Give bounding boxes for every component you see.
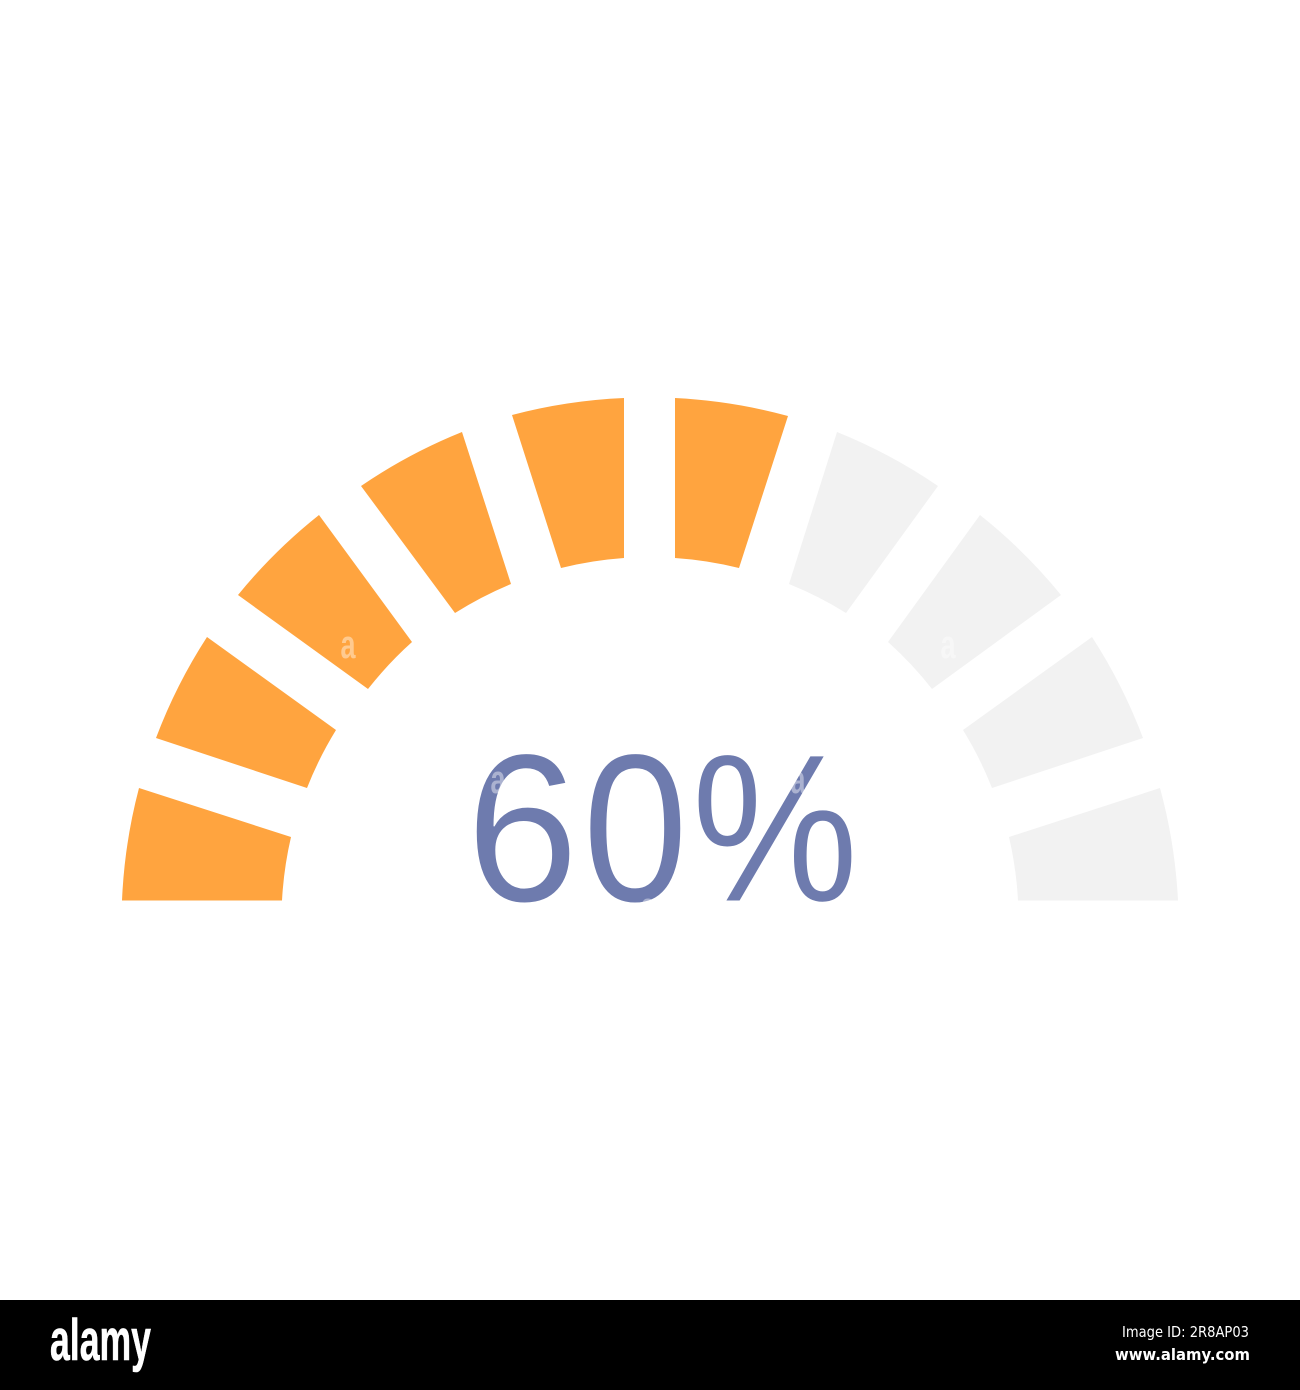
percentage value: 0 — [582, 710, 688, 946]
percentage value: % — [692, 711, 858, 946]
watermark letters: a — [790, 758, 806, 802]
percentage value: 6 — [466, 710, 579, 946]
remaining segments: light grey — [789, 432, 1178, 900]
footer logo: alamy — [50, 1308, 151, 1373]
watermark letters — [340, 623, 956, 929]
footer bar — [0, 1300, 1300, 1390]
percentage value — [466, 710, 858, 946]
watermark letters: a — [340, 623, 356, 667]
filled segments: orange — [122, 398, 788, 900]
watermark letters: a — [640, 885, 656, 929]
watermark letters: a — [490, 758, 506, 802]
footer url: www.alamy.com — [1115, 1345, 1250, 1364]
watermark letters: a — [940, 623, 956, 667]
semicircular gauge — [122, 398, 1178, 900]
footer image id: Image ID: 2R8AP03 — [1122, 1323, 1249, 1341]
